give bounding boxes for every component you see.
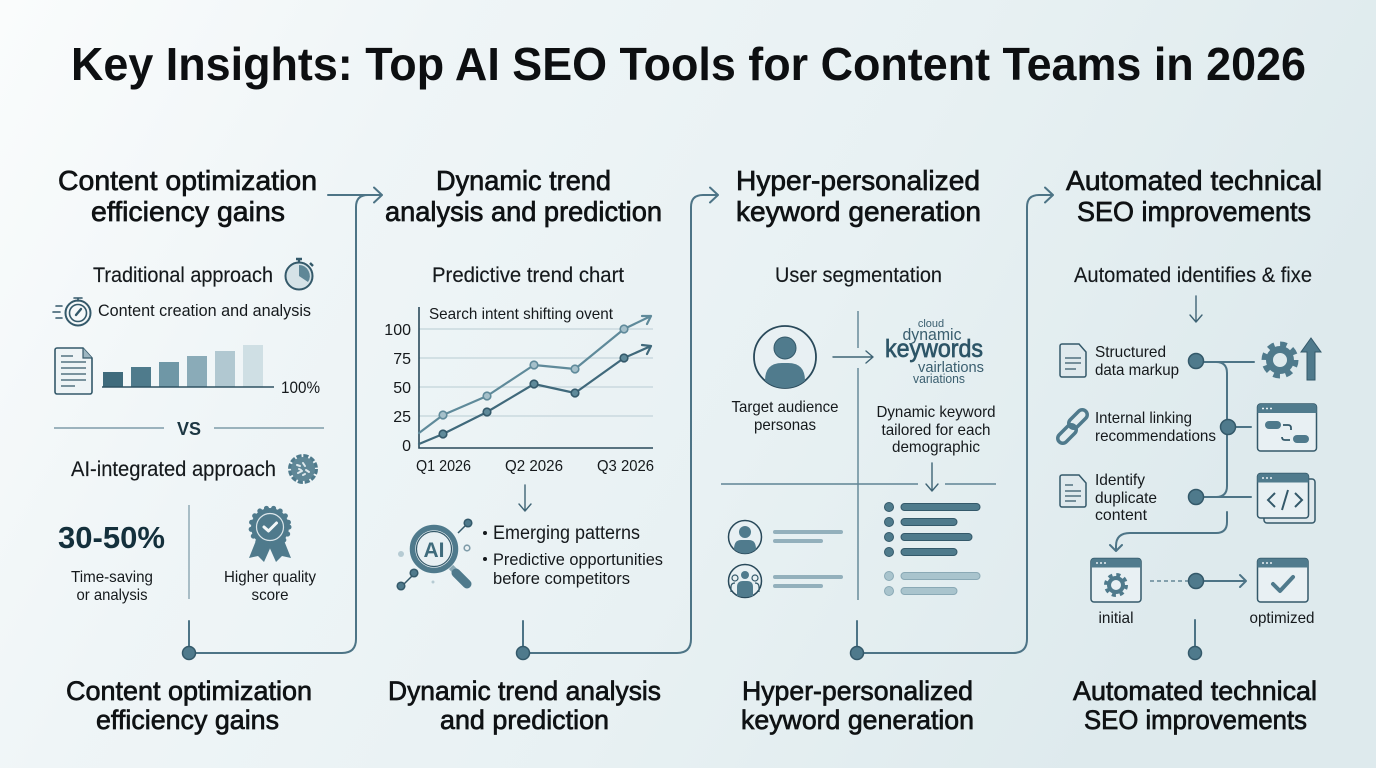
heading: automated technical top bbox=[1066, 165, 1322, 227]
icon: link bbox=[1056, 408, 1089, 445]
flow lines bbox=[1196, 362, 1254, 497]
stat: 30-50%: 30-50% bbox=[58, 520, 165, 555]
label: automated identifies: Automated identifies & fixe bbox=[1074, 264, 1312, 287]
value: 100%: 100% bbox=[281, 378, 320, 397]
text: or analysis: or analysis bbox=[76, 587, 148, 604]
persona text bars bbox=[773, 530, 843, 588]
label: optimized: optimized bbox=[1250, 610, 1314, 627]
label: initial: initial bbox=[1098, 610, 1134, 627]
heading: dynamic trend top bbox=[385, 165, 662, 227]
text: target audience personas bbox=[732, 399, 839, 434]
series: upper line bbox=[419, 316, 651, 433]
label: user segmentation: User segmentation bbox=[775, 264, 942, 287]
axis labels x: Q2 2026 bbox=[505, 458, 563, 475]
heading: content optimization top: Content optimization bbox=[58, 165, 317, 196]
label: predictive trend chart: Predictive trend chart bbox=[432, 264, 624, 287]
bar chart: traditional bbox=[102, 345, 274, 387]
icon: document duplicate bbox=[1060, 475, 1086, 507]
icon: ai magnifier: AI bbox=[424, 539, 444, 562]
heading: dynamic trend top: analysis and prediction bbox=[385, 196, 662, 227]
text: identify duplicate content: Identify bbox=[1095, 472, 1145, 489]
text: bullets bbox=[483, 523, 663, 588]
heading: content optimization bottom bbox=[66, 676, 312, 735]
text: higher quality score: score bbox=[252, 587, 289, 604]
text: dynamic keyword tailored bbox=[876, 404, 996, 456]
text: dynamic keyword tailored: demographic bbox=[892, 439, 980, 456]
axis labels y: 75 bbox=[393, 351, 411, 368]
text: structured data markup: Structured bbox=[1095, 344, 1166, 361]
icon: window check bbox=[1258, 558, 1308, 602]
dashed process line bbox=[1150, 574, 1246, 588]
heading: content optimization bottom: efficiency gains bbox=[96, 705, 279, 735]
arrow: keywords down bbox=[926, 463, 938, 491]
heading: automated technical bottom bbox=[1073, 676, 1317, 735]
axis labels x bbox=[416, 458, 654, 475]
connector end bbox=[1188, 620, 1202, 660]
text: bullets: Predictive opportunities bbox=[493, 550, 663, 569]
label: traditional approach: Traditional approach bbox=[93, 264, 273, 287]
panel: dynamic trend bbox=[384, 165, 663, 735]
text: higher quality score bbox=[224, 569, 316, 604]
heading: hyper-personalized bottom bbox=[741, 676, 974, 735]
text: higher quality score: Higher quality bbox=[224, 569, 316, 586]
icon: quality badge bbox=[249, 508, 291, 562]
heading: dynamic trend top: Dynamic trend bbox=[436, 165, 611, 196]
axis labels y: 0 bbox=[402, 438, 411, 455]
icon: document bbox=[55, 348, 92, 394]
heading: content optimization bottom: Content optimization bbox=[66, 676, 312, 706]
word cloud: keywords: variations bbox=[913, 371, 965, 386]
text: structured data markup bbox=[1095, 344, 1179, 379]
heading: hyper-personalized top: keyword generation bbox=[736, 196, 981, 227]
text: time-saving: Time-saving bbox=[71, 569, 153, 586]
icon: window gear bbox=[1091, 558, 1141, 602]
divider: vs: VS bbox=[177, 419, 201, 439]
icon: stopwatch bbox=[286, 259, 313, 290]
heading: automated technical bottom: Automated technical bbox=[1073, 676, 1317, 706]
text: internal linking: Internal linking bbox=[1095, 410, 1192, 427]
node 1 bbox=[1188, 354, 1204, 368]
arrow: connector 1 to 2 bbox=[182, 188, 382, 660]
heading: hyper-personalized top: Hyper-personalized bbox=[736, 165, 980, 196]
text: internal linking: recommendations bbox=[1095, 428, 1216, 445]
arrow: connector 3 to 4 bbox=[850, 188, 1053, 660]
text: target audience personas: Target audience bbox=[732, 399, 839, 416]
arrow: connector 2 to 3 bbox=[516, 188, 718, 660]
word cloud: keywords: cloud bbox=[918, 318, 944, 330]
icon: ai gear bbox=[290, 456, 316, 482]
heading: automated technical bottom: SEO improvements bbox=[1084, 705, 1307, 735]
word cloud: keywords: vairlations bbox=[918, 359, 984, 376]
text: target audience personas: personas bbox=[754, 417, 816, 434]
arrow: persona to keywords bbox=[833, 351, 873, 363]
icon: document structured bbox=[1060, 344, 1086, 377]
panel: content optimization bbox=[53, 165, 324, 735]
heading: dynamic trend bottom bbox=[388, 676, 661, 735]
icon: target persona bbox=[754, 326, 816, 388]
text: bullets: before competitors bbox=[493, 569, 630, 588]
heading: hyper-personalized bottom: keyword generation bbox=[741, 705, 974, 735]
series: lower line bbox=[419, 345, 651, 444]
line chart: search intent bbox=[384, 306, 654, 475]
icon: fast stopwatch bbox=[53, 298, 90, 326]
icon: gear and up arrow bbox=[1264, 338, 1321, 380]
word cloud: keywords: keywords bbox=[885, 335, 983, 363]
text: identify duplicate content bbox=[1095, 472, 1157, 524]
heading: automated technical top: SEO improvements bbox=[1077, 196, 1311, 227]
heading: dynamic trend bottom: and prediction bbox=[440, 705, 609, 735]
axis labels y: 100 bbox=[384, 322, 411, 339]
heading: hyper-personalized top bbox=[736, 165, 981, 227]
text: bullets: Emerging patterns bbox=[493, 523, 640, 544]
keyword list: secondary bbox=[884, 572, 980, 596]
icon: single user bbox=[728, 520, 762, 554]
heading: content optimization top bbox=[58, 165, 317, 227]
title: Key Insights: Top AI SEO Tools for Content Teams in 2026 bbox=[71, 38, 1306, 90]
heading: automated technical top: Automated technical bbox=[1066, 165, 1322, 196]
arrow: chart down bbox=[519, 485, 531, 511]
axis labels x: Q3 2026 bbox=[597, 458, 654, 475]
panel: automated technical bbox=[1056, 165, 1322, 735]
text: structured data markup: data markup bbox=[1095, 362, 1179, 379]
chart caption: Search intent shifting ovent bbox=[429, 306, 614, 323]
word cloud: keywords: dynamic bbox=[902, 325, 962, 344]
text: internal linking bbox=[1095, 410, 1216, 445]
node 2 bbox=[1220, 420, 1236, 434]
axis labels x: Q1 2026 bbox=[416, 458, 471, 475]
icon: window links bbox=[1258, 404, 1316, 451]
axis labels y bbox=[384, 322, 411, 455]
heading: hyper-personalized bottom: Hyper-personalized bbox=[742, 676, 973, 706]
icon: ai magnifier bbox=[397, 519, 472, 590]
arrow: to initial bbox=[1110, 512, 1227, 551]
text: identify duplicate content: duplicate bbox=[1095, 490, 1157, 507]
heading: dynamic trend bottom: Dynamic trend analysis bbox=[388, 676, 661, 706]
icon: user group bbox=[728, 564, 762, 598]
text: dynamic keyword tailored: Dynamic keyword bbox=[876, 404, 996, 421]
text: dynamic keyword tailored: tailored for each bbox=[882, 422, 990, 439]
axis labels y: 25 bbox=[393, 409, 411, 426]
axis labels y: 50 bbox=[393, 380, 411, 397]
heading: content optimization top: efficiency gains bbox=[91, 196, 285, 227]
word cloud: keywords bbox=[885, 318, 984, 386]
arrow: down to list bbox=[1190, 296, 1202, 322]
text: identify duplicate content: content bbox=[1095, 507, 1148, 524]
label: ai-integrated approach: AI-integrated approach bbox=[71, 458, 276, 481]
icon: window code bbox=[1258, 474, 1315, 523]
text: content creation and analysis: Content creation and analysis bbox=[98, 301, 311, 320]
keyword list: primary bbox=[884, 502, 980, 556]
node 3 bbox=[1188, 490, 1204, 504]
panel: hyper-personalized bbox=[721, 165, 996, 735]
